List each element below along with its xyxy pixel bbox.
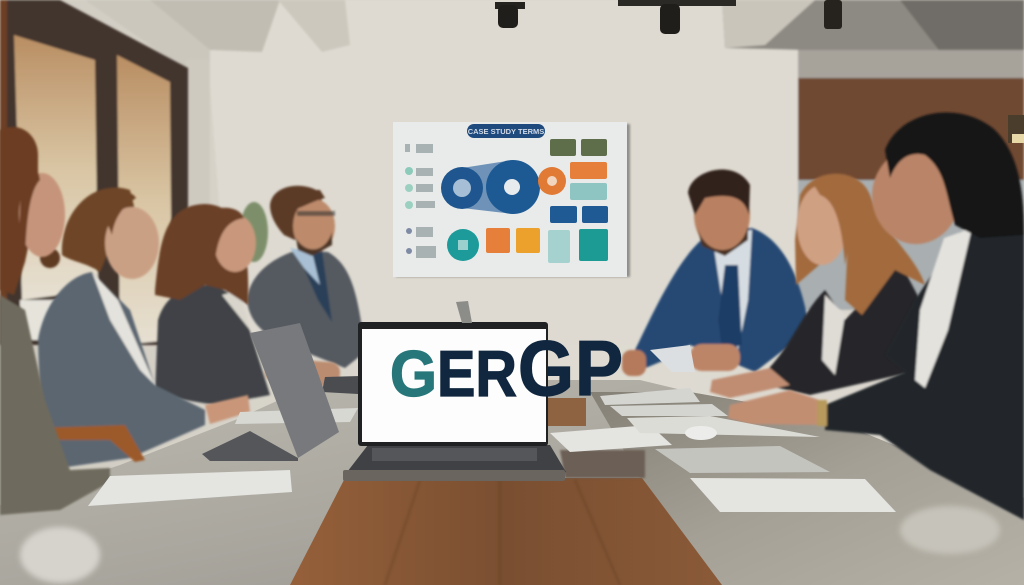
person: woman with ginger hair bbox=[710, 174, 925, 398]
person: woman in dark jacket bbox=[155, 204, 341, 405]
main laptop bbox=[343, 322, 566, 481]
laptop screen bbox=[362, 329, 546, 442]
small laptop at left bbox=[202, 323, 360, 461]
GERGP logo: ER bbox=[437, 337, 517, 410]
person: woman with black hair bbox=[728, 113, 1024, 520]
person: man in grey suit at back left bbox=[247, 186, 365, 368]
GERGP logo bbox=[390, 324, 623, 412]
GERGP logo: P bbox=[575, 324, 623, 412]
person: woman far left bbox=[0, 127, 110, 515]
plant bbox=[240, 202, 268, 262]
wall poster bbox=[393, 122, 630, 277]
window with frame bbox=[0, 0, 188, 345]
speaker/monitor behind laptop bbox=[456, 301, 472, 323]
conference table bbox=[0, 380, 1024, 585]
ceiling spotlights bbox=[495, 0, 1024, 143]
poster left list bbox=[405, 144, 436, 258]
GERGP logo: G bbox=[518, 324, 574, 412]
person: man in blue suit bbox=[622, 170, 808, 376]
poster title: CASE STUDY TERMS bbox=[468, 127, 544, 136]
poster diagram circles bbox=[441, 160, 566, 261]
person: woman in grey-blue blazer bbox=[35, 187, 250, 468]
GERGP logo: G bbox=[390, 337, 437, 410]
poster title bbox=[467, 124, 545, 138]
papers on table bbox=[88, 345, 896, 512]
poster cards bbox=[486, 139, 608, 263]
